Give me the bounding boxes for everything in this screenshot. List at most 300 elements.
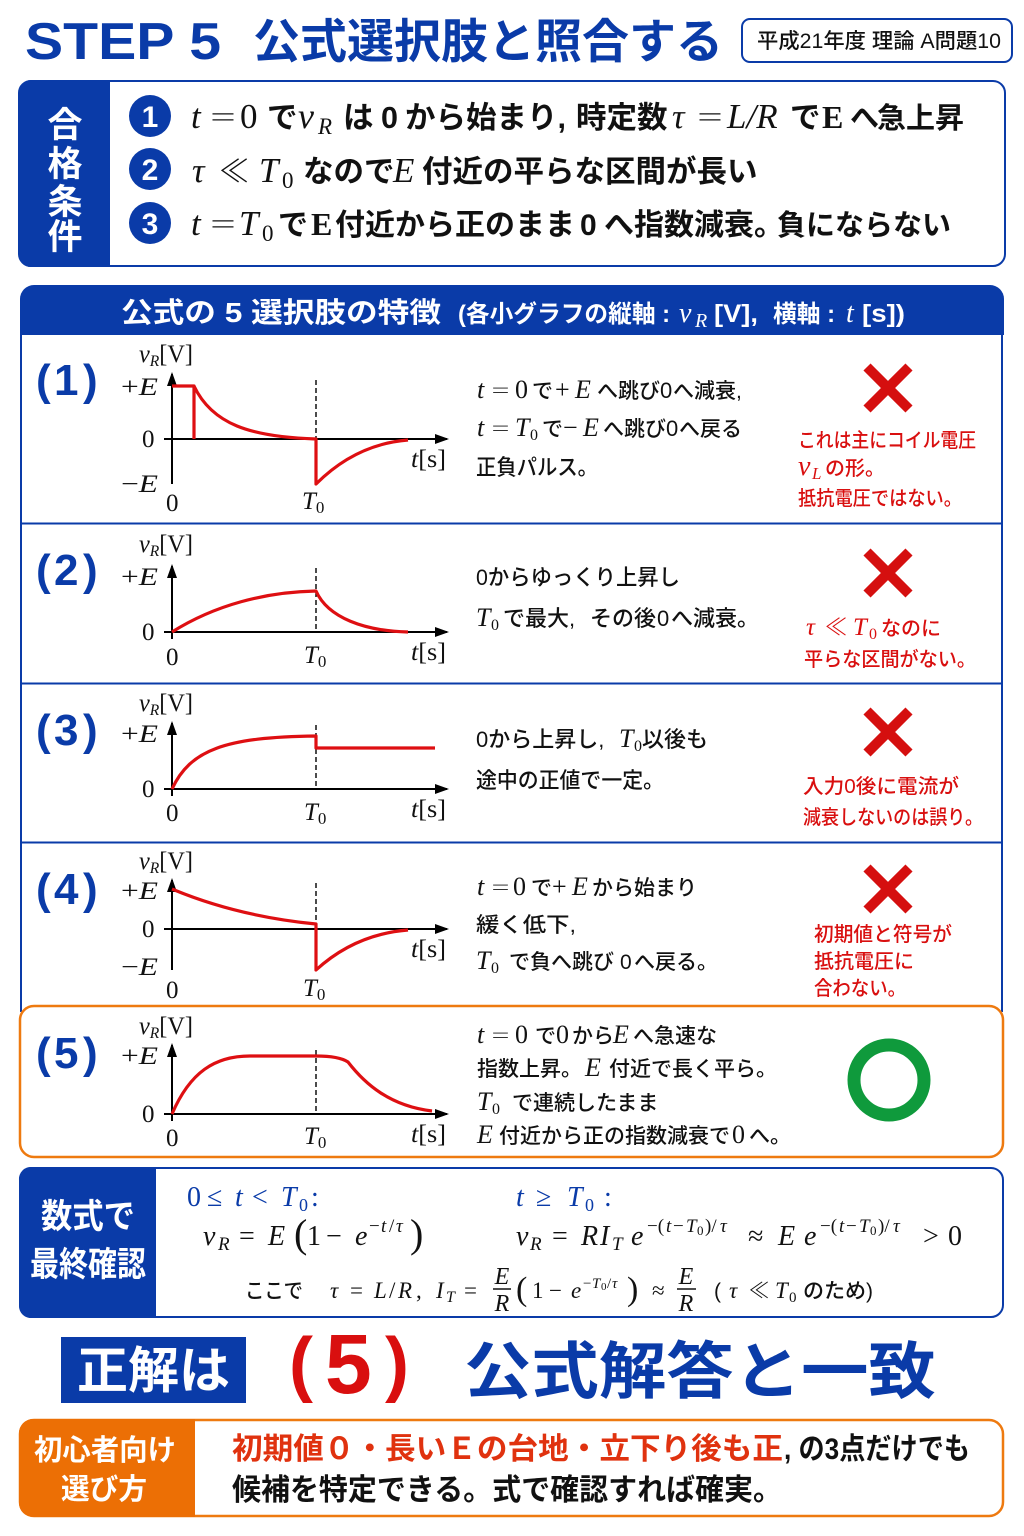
description 5: E — [476, 1120, 493, 1149]
tips text: 候補を特定できる。式で確認すれば確実。 — [232, 1474, 782, 1507]
description 5: T — [477, 1087, 493, 1116]
panel heading: [s]) — [862, 300, 905, 328]
row 3 — [36, 690, 983, 829]
description 3: 途中の正値で一定。 — [476, 768, 664, 793]
graph 2: T — [304, 642, 320, 669]
description 4: 0 — [513, 872, 526, 901]
row 2 — [36, 531, 976, 671]
condition 3: T — [239, 204, 261, 243]
description 4: で — [531, 877, 552, 900]
graph 5: +E — [121, 1043, 158, 1070]
formula: definitions: ) — [627, 1271, 638, 1308]
graph 1: v — [139, 341, 151, 368]
option number 1: 1 — [54, 356, 78, 405]
formula: definitions: e — [571, 1278, 581, 1303]
option number 3: ( — [36, 706, 51, 755]
answer number: ) — [385, 1324, 409, 1404]
description 5: から — [572, 1025, 614, 1048]
option number 5: 5 — [54, 1029, 78, 1078]
title: STEP 5 — [25, 13, 221, 71]
condition 1: は — [343, 101, 374, 135]
verdict 3: 減衰しないのは誤り。 — [803, 806, 983, 829]
heading: final check: 最終確認 — [30, 1246, 146, 1284]
description 4: t — [477, 872, 485, 901]
description 5: ＝ — [490, 1024, 511, 1048]
formula: definitions: = — [464, 1278, 477, 1303]
description 1: へ戻る — [679, 418, 742, 441]
formula: after T0: v — [516, 1221, 529, 1252]
formula: after T0: E — [777, 1221, 795, 1252]
formula: definitions: / — [389, 1278, 396, 1303]
condition 2: 2 — [142, 154, 158, 187]
description 1: E — [574, 375, 591, 404]
condition 1: で — [267, 101, 298, 135]
formula: definitions: = — [350, 1278, 363, 1303]
formula: before T0: 1 — [307, 1221, 321, 1252]
cross mark 1 — [867, 367, 909, 409]
option number 4: ( — [36, 865, 51, 914]
description 3: 以後も — [642, 727, 708, 752]
description 5 — [476, 1020, 791, 1149]
condition 3: 0 — [262, 221, 274, 246]
description 1: 0 — [666, 416, 678, 441]
graph 1: t[s] — [411, 446, 446, 473]
formula: before T0: τ — [396, 1216, 404, 1237]
formula: after T0: ≈ — [748, 1221, 763, 1252]
description 1: へ跳び — [603, 418, 666, 441]
option number 3: 3 — [54, 706, 78, 755]
formula: before T0: ( — [294, 1211, 307, 1256]
verdict 1: 抵抗電圧ではない。 — [798, 487, 962, 510]
formula: after T0 — [516, 1182, 962, 1255]
graph 2: 0 — [318, 652, 326, 671]
formula: definitions: R — [494, 1291, 510, 1317]
description 5: 指数上昇。 — [477, 1058, 582, 1081]
condition 2: τ — [192, 151, 206, 190]
description 1: で — [542, 418, 563, 441]
formula: definitions: ≪ — [748, 1278, 770, 1303]
description 2: その後 — [590, 606, 656, 631]
formula: before T0: e — [355, 1221, 367, 1252]
answer label box — [61, 1337, 246, 1403]
formula: after T0: ≥ — [536, 1182, 551, 1213]
description 1: へ跳び — [597, 380, 660, 403]
graph 5: t[s] — [411, 1121, 446, 1148]
formula: after T0: )/ — [878, 1216, 890, 1237]
verdict 2: 0 — [869, 626, 877, 643]
formula: before T0: 0 — [299, 1195, 308, 1215]
description 1: T — [515, 413, 531, 442]
condition 1: へ — [850, 103, 879, 135]
formula: after T0: T — [859, 1216, 871, 1237]
graph 1: R — [149, 353, 159, 370]
title: 公式選択肢と照合する — [253, 15, 723, 68]
formula: before T0 — [187, 1182, 423, 1256]
graph 5: 0 — [142, 1101, 154, 1128]
description 2: で最大, — [503, 606, 575, 631]
description 2: 0 — [491, 617, 499, 634]
condition 1: ＝ — [208, 102, 238, 135]
condition 1: 急上昇 — [877, 102, 964, 135]
graph 3: t[s] — [411, 796, 446, 823]
option number 4: ) — [83, 865, 98, 914]
description 5: 0 — [556, 1020, 569, 1049]
graph 4 — [121, 848, 447, 1004]
description 3: 0 — [634, 738, 642, 755]
graph 5: 0 — [318, 1133, 326, 1152]
answer label box: 正解は — [77, 1343, 230, 1399]
description 4: + — [552, 872, 567, 901]
description 1: − — [563, 413, 578, 442]
verdict 3: 入力0後に電流が — [803, 775, 959, 798]
formula: definitions — [245, 1264, 873, 1317]
formula: definitions: ( — [714, 1280, 721, 1303]
graph 2: v — [139, 531, 151, 558]
panel: pass conditions — [19, 80, 1005, 267]
formula: after T0: τ — [720, 1216, 728, 1237]
description 4: E — [571, 872, 588, 901]
description 5: へ急速な — [633, 1025, 717, 1048]
formula: definitions: ( — [516, 1271, 527, 1308]
formula: definitions: T — [446, 1289, 456, 1306]
formula: after T0: τ — [893, 1216, 901, 1237]
condition 3: t — [191, 204, 202, 243]
formula: definitions: − — [549, 1278, 562, 1303]
graph 2 — [121, 531, 447, 671]
formula: definitions: E — [494, 1264, 510, 1290]
panel heading: (各小グラフの縦軸 : — [458, 300, 670, 328]
formula: definitions: − — [583, 1276, 591, 1292]
graph 2: +E — [121, 564, 158, 591]
description 1: 0 — [660, 378, 672, 403]
panel heading: t — [846, 298, 855, 329]
condition 3 — [129, 202, 951, 246]
formula: before T0: R — [217, 1234, 230, 1255]
exam source badge: 平成21年度 理論 A問題10 — [757, 30, 1001, 53]
heading: final check: 数式で — [41, 1198, 135, 1236]
condition 1: R — [317, 114, 332, 139]
heading: pass conditions: 格 — [47, 145, 83, 184]
formula: before T0: − — [326, 1221, 342, 1252]
formula: definitions: E — [678, 1264, 694, 1290]
formula: after T0: R — [580, 1221, 598, 1252]
formula: after T0: e — [631, 1221, 643, 1252]
answer banner — [61, 1317, 936, 1411]
condition 2: E — [392, 151, 414, 190]
panel heading: [V], — [714, 300, 758, 328]
circle mark: correct — [854, 1045, 924, 1115]
formula: before T0: v — [203, 1221, 216, 1252]
graph 2: [V] — [159, 531, 193, 558]
row 4 — [36, 848, 952, 1004]
description 1: 正負パルス。 — [476, 455, 598, 480]
formula: definitions: T — [592, 1276, 602, 1292]
description 2: 0からゆっくり上昇し — [476, 565, 680, 590]
graph 3 — [121, 690, 447, 828]
formula: definitions: / — [607, 1276, 612, 1292]
formula: after T0: R — [529, 1234, 542, 1255]
graph 1: T — [302, 488, 318, 515]
option number 2: 2 — [54, 546, 78, 595]
option number 5: ( — [36, 1029, 51, 1078]
description 5: E — [612, 1020, 629, 1049]
description 4 — [476, 872, 718, 977]
cross mark 3 — [867, 711, 909, 753]
condition 1: から始まり, — [405, 101, 566, 135]
condition 2: なので — [303, 155, 394, 189]
graph 4: [V] — [159, 848, 193, 875]
description 3: 0から上昇し, — [476, 727, 604, 752]
description 4: へ戻る。 — [634, 951, 718, 974]
graph 5: [V] — [159, 1013, 193, 1040]
formula: after T0: − — [846, 1216, 857, 1237]
tips text — [232, 1433, 970, 1507]
description 5: 付近で長く平ら。 — [609, 1058, 777, 1081]
option number 5: ) — [83, 1029, 98, 1078]
formula: after T0: t — [516, 1182, 525, 1213]
graph 3: T — [304, 799, 320, 826]
graph 1: [V] — [159, 341, 193, 368]
formula: after T0: = — [552, 1221, 568, 1252]
formula: after T0: −( — [647, 1216, 664, 1237]
condition 1: τ — [672, 97, 686, 136]
description 3: T — [619, 724, 635, 753]
graph 5: T — [304, 1123, 320, 1150]
graph 2: t[s] — [411, 639, 446, 666]
cross mark 2 — [867, 552, 909, 594]
description 3 — [476, 724, 708, 793]
verdict 2: 平らな区間がない。 — [804, 648, 976, 671]
graph 1: 0 — [316, 498, 324, 517]
formula: definitions: ≈ — [652, 1278, 665, 1303]
graph 4: −E — [121, 954, 158, 981]
verdict 3 — [803, 775, 983, 829]
formula: definitions: 0 — [789, 1290, 796, 1306]
graph 4: 0 — [166, 977, 178, 1004]
condition 1: 0 — [240, 97, 258, 136]
verdict 1: L — [811, 464, 821, 483]
description 4: から始まり — [592, 877, 697, 900]
row 5: correct answer — [20, 1006, 1003, 1157]
description 4: ＝ — [490, 876, 511, 900]
tips heading — [34, 1434, 176, 1506]
formula: before T0: / — [389, 1216, 395, 1237]
description 1: ＝ — [490, 417, 511, 441]
option number 1: ) — [83, 356, 98, 405]
formula: after T0: t — [666, 1216, 672, 1237]
formula: before T0: 0 — [187, 1182, 201, 1213]
verdict 4 — [814, 923, 952, 1000]
formula: definitions: τ — [612, 1276, 618, 1292]
description 4: 0 — [620, 951, 632, 974]
graph 5: v — [139, 1013, 151, 1040]
formula: after T0: 0 — [697, 1223, 704, 1238]
formula: after T0: : — [604, 1182, 612, 1213]
condition 1: L/R — [726, 97, 778, 136]
description 2: 0 — [657, 606, 669, 631]
tips heading: 初心者向け — [34, 1434, 176, 1467]
formula: after T0: I — [599, 1221, 611, 1252]
formula: definitions: 1 — [532, 1278, 544, 1303]
condition 3: 負にならない — [777, 209, 951, 242]
answer number: 5 — [325, 1317, 372, 1411]
formula: after T0: t — [839, 1216, 845, 1237]
description 5: で連続したまま — [512, 1092, 658, 1115]
verdict 2: なのに — [881, 618, 941, 640]
condition 1: 時定数 — [576, 101, 668, 135]
condition 1: 1 — [142, 101, 158, 134]
graph 3: R — [149, 702, 159, 719]
graph 2: 0 — [166, 644, 178, 671]
description 1: E — [582, 413, 599, 442]
tips text: 初期値０・長いＥの台地・立下り後も正 — [232, 1433, 783, 1466]
condition 3: で — [278, 209, 308, 242]
graph 2: R — [149, 543, 159, 560]
graph 3: 0 — [318, 809, 326, 828]
formula: after T0: 0 — [870, 1223, 876, 1238]
condition 1: で — [790, 101, 820, 135]
description 1: へ減衰, — [673, 380, 742, 403]
graph 3: [V] — [159, 690, 193, 717]
exam source badge — [742, 19, 1012, 62]
condition 1: t — [191, 97, 202, 136]
description 5: t — [477, 1020, 485, 1049]
graph 2: 0 — [142, 619, 154, 646]
answer note: 公式解答と一致 — [464, 1338, 936, 1407]
panel heading — [121, 297, 905, 332]
formula: after T0: 0 — [948, 1221, 962, 1252]
panel: tips for beginners — [19, 1419, 1003, 1517]
formula: after T0: e — [804, 1221, 816, 1252]
formula: after T0: > — [923, 1221, 939, 1252]
condition 2: ≪ — [218, 153, 250, 189]
tips heading: 選び方 — [61, 1473, 147, 1506]
graph 5 — [121, 1013, 447, 1152]
formula: before T0: t — [235, 1182, 244, 1213]
graph 4: 0 — [142, 916, 154, 943]
description 5: 0 — [732, 1120, 745, 1149]
description 2: へ減衰。 — [671, 606, 759, 631]
graph 3: 0 — [142, 776, 154, 803]
formula: definitions: I — [435, 1278, 445, 1303]
description 5: 0 — [492, 1101, 500, 1118]
heading: pass conditions: 件 — [47, 218, 83, 257]
condition 2 — [129, 148, 758, 193]
condition 1: v — [298, 96, 314, 136]
graph 5: R — [149, 1025, 159, 1042]
graph 1: +E — [121, 374, 158, 401]
condition 2: T — [259, 151, 281, 190]
condition 3: ＝ — [208, 209, 238, 242]
condition 3: へ指数減衰。 — [604, 209, 784, 242]
formula: before T0: = — [239, 1221, 255, 1252]
description 2: T — [476, 603, 492, 632]
formula: before T0: : — [311, 1182, 319, 1213]
heading: pass conditions: 条 — [47, 183, 83, 222]
condition 3: 0 — [580, 209, 597, 242]
graph 4: R — [149, 860, 159, 877]
description 4: 0 — [491, 960, 499, 977]
verdict 1 — [798, 429, 976, 510]
option number 3: ) — [83, 706, 98, 755]
option number 2: ) — [83, 546, 98, 595]
graph 3: v — [139, 690, 151, 717]
verdict 2 — [804, 614, 976, 671]
verdict 4: 合わない。 — [814, 977, 906, 1000]
heading: pass conditions — [47, 106, 83, 257]
row 1 — [36, 341, 976, 517]
description 1: 0 — [515, 375, 528, 404]
graph 3: 0 — [166, 800, 178, 827]
answer number: ( — [289, 1324, 313, 1404]
formula: after T0: T — [612, 1234, 624, 1255]
description 1: t — [477, 413, 485, 442]
verdict 2: ≪ — [824, 615, 848, 641]
formula: definitions: ここで — [245, 1280, 303, 1303]
cross mark 4 — [867, 868, 909, 910]
verdict 1: これは主にコイル電圧 — [798, 429, 976, 452]
formula: after T0: T — [686, 1216, 698, 1237]
description 4: 緩く低下, — [476, 914, 576, 937]
graph 3: +E — [121, 721, 158, 748]
formula: before T0: t — [381, 1216, 387, 1237]
formula: definitions: 0 — [601, 1281, 607, 1293]
description 4: で負へ跳び — [509, 951, 614, 974]
condition 3: 3 — [142, 208, 158, 241]
heading: final check — [30, 1198, 146, 1284]
description 1: で — [532, 380, 553, 403]
formula: before T0: − — [369, 1216, 380, 1237]
formula: before T0: < — [252, 1182, 268, 1213]
graph 1: 0 — [142, 426, 154, 453]
panel heading: v — [679, 298, 692, 329]
condition 2: 付近の平らな区間が長い — [422, 154, 758, 189]
verdict 1: v — [798, 451, 811, 482]
panel heading: R — [694, 310, 707, 332]
formula: definitions: τ — [729, 1278, 738, 1303]
verdict 4: 抵抗電圧に — [814, 950, 914, 973]
tips text: , の3点だけでも — [784, 1433, 970, 1466]
option number 1: ( — [36, 356, 51, 405]
condition 3: E — [311, 206, 332, 242]
title — [25, 13, 723, 71]
graph 1: 0 — [166, 490, 178, 517]
graph 4: +E — [121, 878, 158, 905]
graph 4: t[s] — [411, 936, 446, 963]
verdict 4: 初期値と符号が — [814, 923, 952, 946]
graph 4: T — [303, 975, 319, 1002]
formula: definitions: R — [678, 1291, 694, 1317]
formula: definitions: τ — [330, 1278, 339, 1303]
description 5: 0 — [515, 1020, 528, 1049]
heading: pass conditions: 合 — [47, 106, 83, 145]
panel: final check with formulas — [19, 1167, 1003, 1318]
description 4: T — [476, 946, 492, 975]
description 1 — [476, 375, 742, 480]
condition 1: E — [822, 99, 843, 135]
graph 4: v — [139, 848, 151, 875]
condition 1 — [129, 95, 964, 139]
condition 2: 0 — [282, 168, 294, 193]
description 1: 0 — [530, 427, 538, 444]
graph 5: 0 — [166, 1125, 178, 1152]
option number 2: ( — [36, 546, 51, 595]
description 1: t — [477, 375, 485, 404]
formula: before T0: E — [267, 1221, 285, 1252]
formula: before T0: ≤ — [207, 1182, 222, 1213]
description 5: E — [584, 1053, 601, 1082]
description 2 — [476, 565, 759, 634]
